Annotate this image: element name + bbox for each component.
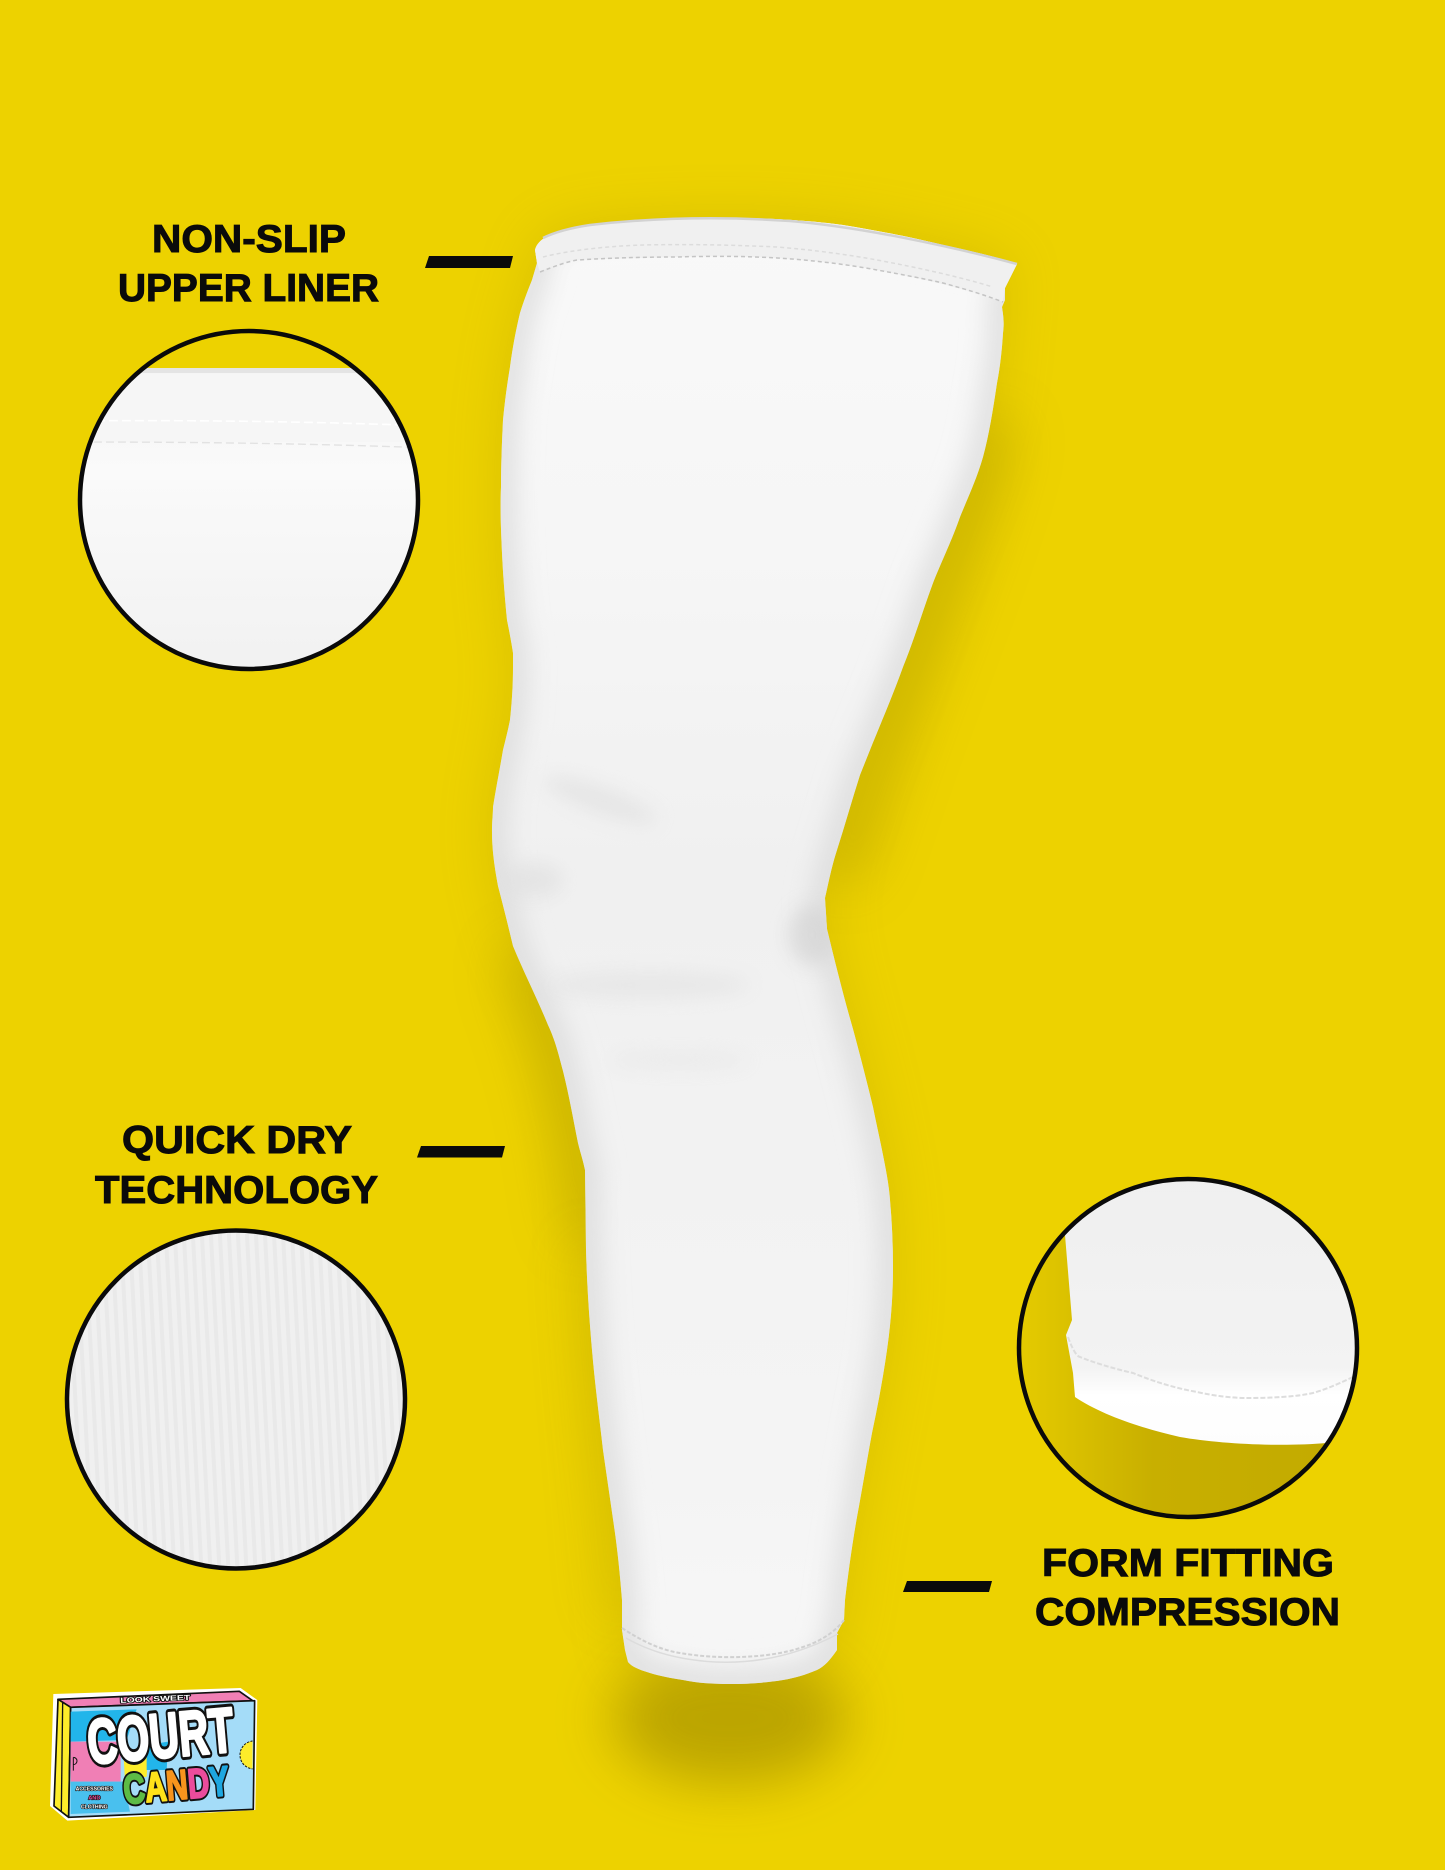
logo tagline: ACCESSORIES xyxy=(76,1787,113,1793)
logo wordmark: candy: CANDY xyxy=(121,1757,231,1813)
infographic canvas xyxy=(50,212,1360,1821)
label: quick dry technology: TECHNOLOGY xyxy=(95,1169,378,1212)
rim top edge xyxy=(543,218,1017,264)
logo box white outline xyxy=(50,1688,257,1821)
logo: court candy box xyxy=(50,1688,268,1821)
leg shadow xyxy=(492,218,1017,1784)
circle detail: fabric texture xyxy=(60,1225,412,1575)
sleeve body xyxy=(492,218,1017,1684)
label: quick dry technology xyxy=(95,1119,378,1212)
pointer bar: non-slip upper liner xyxy=(425,256,513,268)
circle detail: upper liner xyxy=(70,331,430,678)
logo top text: LOOK SWEET xyxy=(120,1693,191,1705)
logo box side face xyxy=(54,1699,71,1817)
label: form fitting compression xyxy=(1035,1542,1340,1634)
label: quick dry technology: QUICK DRY xyxy=(122,1119,352,1162)
label: form fitting compression: FORM FITTING xyxy=(1042,1542,1334,1585)
sleeve shading xyxy=(492,218,1017,1684)
label: non-slip upper liner: UPPER LINER xyxy=(118,267,379,310)
logo wordmark: candy: CANDY xyxy=(121,1757,231,1813)
logo box top face xyxy=(58,1691,253,1707)
upper rim band xyxy=(535,218,1017,302)
circle detail: cuff compression xyxy=(1015,1170,1370,1520)
rim stitching xyxy=(540,256,1003,302)
logo wordmark: court: COURT xyxy=(84,1695,237,1778)
logo wordmark: court xyxy=(84,1695,237,1778)
logo front decorations xyxy=(71,1709,268,1814)
logo box front face xyxy=(69,1701,255,1817)
logo tagline: CLOTHING xyxy=(81,1804,108,1810)
logo tagline xyxy=(76,1787,113,1810)
label: non-slip upper liner: NON-SLIP xyxy=(152,218,346,261)
label: form fitting compression: COMPRESSION xyxy=(1035,1591,1340,1634)
label: non-slip upper liner xyxy=(118,218,379,310)
pointer bar: quick dry technology xyxy=(417,1146,505,1158)
knee sleeve product xyxy=(492,218,1017,1684)
lower cuff stitching xyxy=(622,1620,844,1657)
pointer bar: form fitting compression xyxy=(903,1581,992,1592)
logo tagline: AND xyxy=(88,1795,100,1801)
logo wordmark: court: COURT xyxy=(84,1695,237,1778)
